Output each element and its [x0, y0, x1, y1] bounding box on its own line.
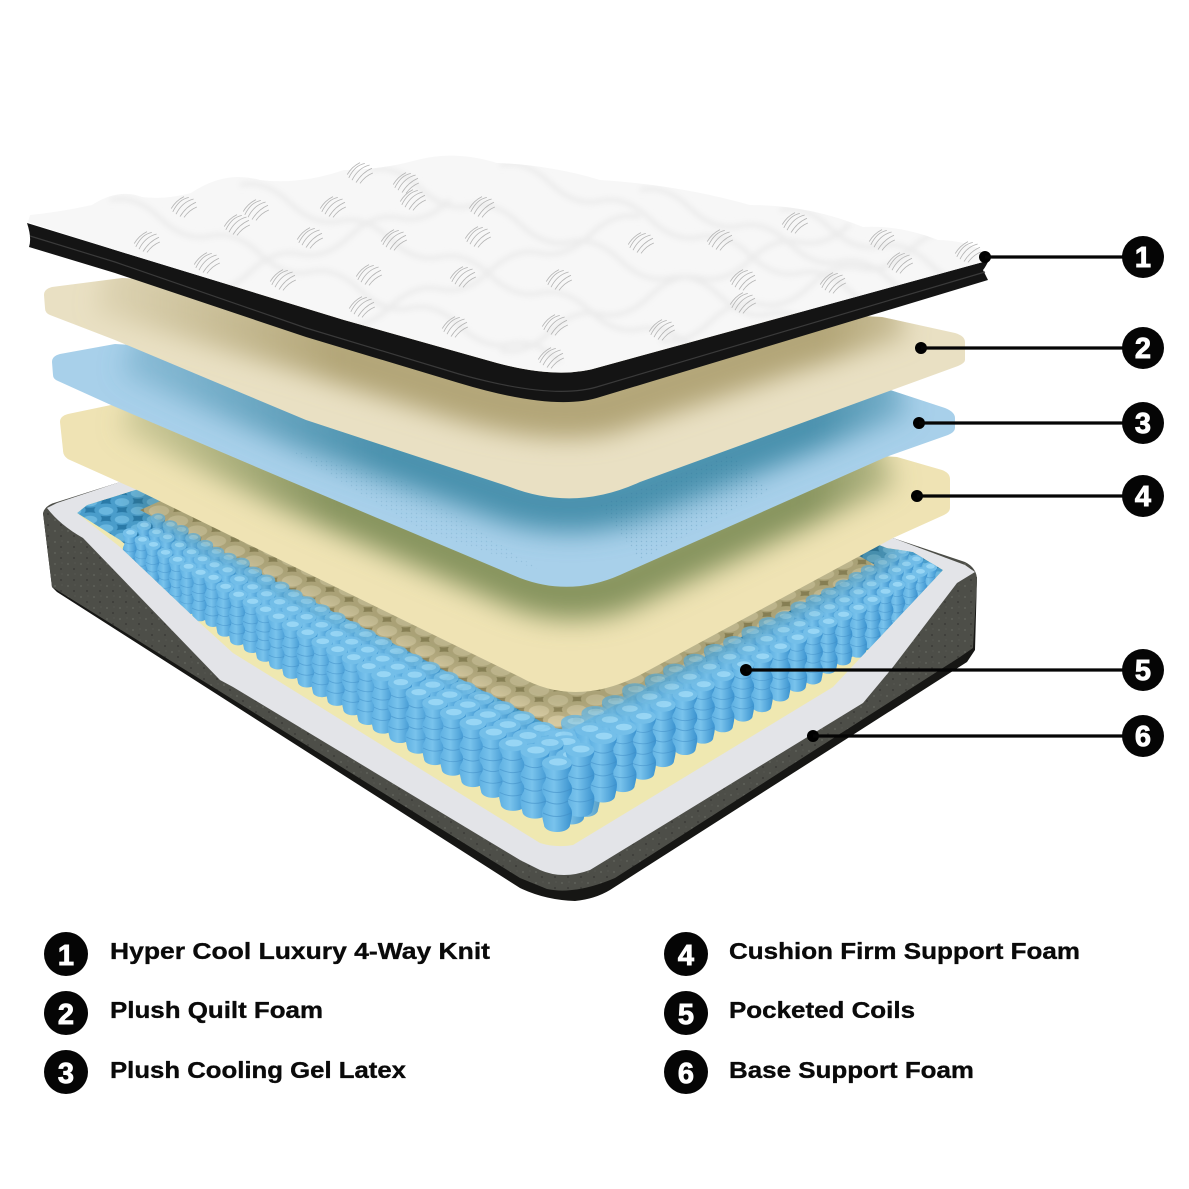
shadow from foam above: [137, 495, 893, 697]
legend item 6: Base Support Foam: [729, 1057, 974, 1083]
legend item 3: 3: [58, 1058, 74, 1090]
white knit surface: [28, 156, 987, 373]
callout 4: [911, 475, 1164, 517]
blue coil tops: [77, 490, 943, 732]
callout 2: 2: [1135, 333, 1151, 365]
foam 2 shadow: [100, 285, 900, 410]
legend item 6: 6: [678, 1058, 694, 1090]
base black bottom edge: [43, 513, 977, 901]
yellow bed under coils: [77, 400, 943, 846]
knit motifs: [134, 163, 981, 368]
legend item 1: Hyper Cool Luxury 4-Way Knit: [110, 938, 490, 964]
callout 6: 6: [1135, 721, 1151, 753]
layer 5: pocketed coils: [77, 490, 943, 846]
legend item 4: Cushion Firm Support Foam: [729, 938, 1080, 964]
foam 2 body: [44, 278, 965, 498]
base dark side wall: [43, 400, 977, 891]
legend item 2: Plush Quilt Foam: [110, 997, 323, 1023]
foam 3 body: [52, 344, 955, 587]
legend item 3: [44, 1050, 406, 1094]
legend item 5: [664, 991, 915, 1035]
legend item 6: [664, 1050, 974, 1094]
callout 5: 5: [1135, 655, 1151, 687]
callout 4: 4: [1135, 481, 1151, 513]
legend: [44, 932, 1080, 1094]
black side band: [27, 223, 990, 402]
foam 4 shadow: [130, 405, 886, 593]
legend item 5: 5: [678, 999, 694, 1031]
tan comfort coils: [140, 501, 874, 730]
callout 3: 3: [1135, 408, 1151, 440]
legend item 5: Pocketed Coils: [729, 997, 915, 1023]
layer 3: plush cooling gel latex: [52, 344, 955, 587]
coil field: [77, 490, 943, 832]
layer 1: hyper cool knit top: [27, 156, 990, 402]
layer 2: plush quilt foam: [44, 278, 965, 498]
callout 1: 1: [1135, 242, 1151, 274]
legend item 1: 1: [58, 940, 74, 972]
callout 2: [915, 327, 1164, 369]
base white foam top: [47, 400, 975, 875]
layer 4: cushion firm support foam: [60, 405, 950, 692]
callout 1: [979, 236, 1164, 278]
callout 6: [807, 715, 1164, 757]
quilt waves: [226, 202, 944, 350]
layer 6: base support foam: [43, 400, 977, 901]
foam 4 body: [60, 405, 950, 692]
legend item 3: Plush Cooling Gel Latex: [110, 1057, 406, 1083]
band groove: [30, 236, 985, 391]
callout 3: [913, 402, 1164, 444]
legend item 2: 2: [58, 999, 74, 1031]
legend item 1: [44, 932, 490, 976]
outer coil rows: [123, 513, 937, 832]
legend item 4: [664, 932, 1080, 976]
callout 5: [740, 649, 1164, 691]
legend item 2: [44, 991, 323, 1035]
foam 3 shadow and gel speckle: [130, 348, 900, 570]
legend item 4: 4: [678, 940, 694, 972]
